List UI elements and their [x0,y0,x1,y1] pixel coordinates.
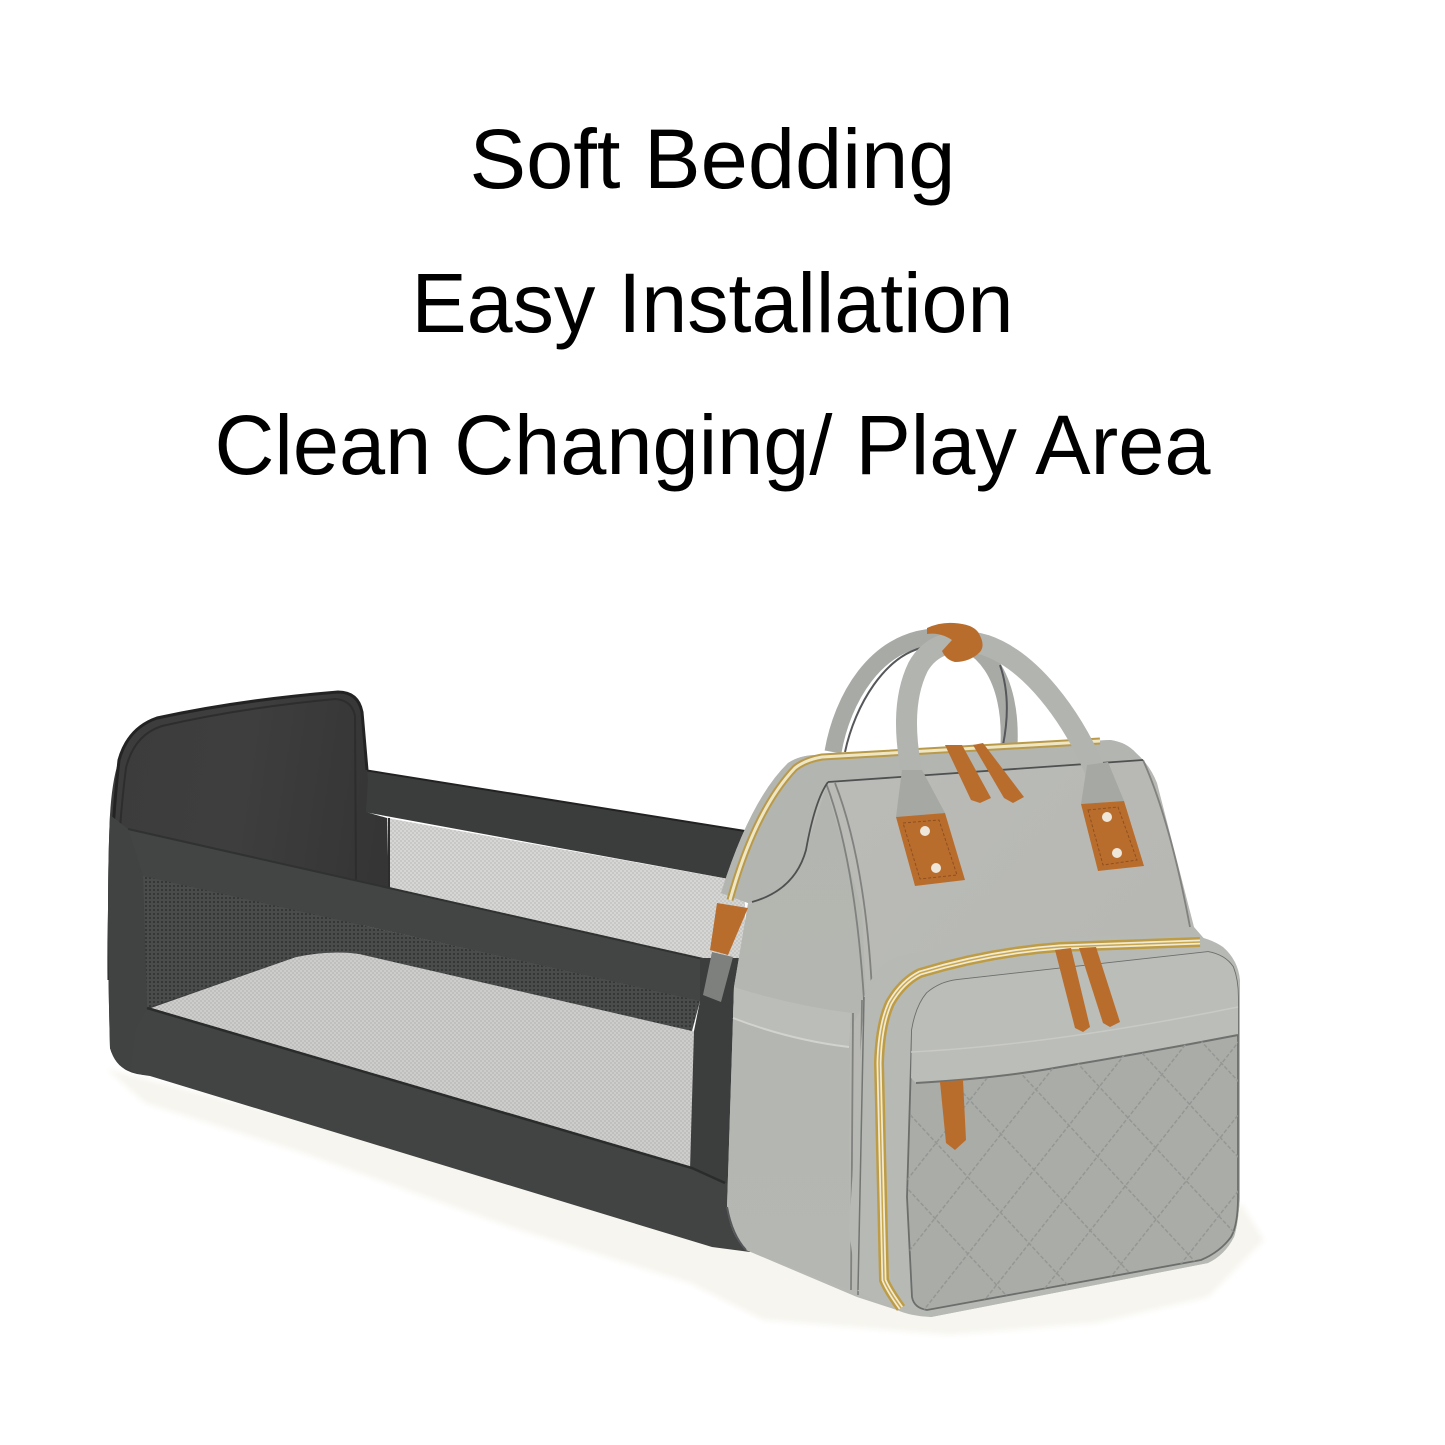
heading: Soft Bedding: Soft Bedding [470,112,956,206]
backpack side and front body [721,740,1240,1317]
title: feature list [214,112,1211,492]
backpack side panel [727,787,866,1290]
side strap: buckle [703,952,733,1002]
bassinet end mesh column [690,958,745,1190]
bassinet bottom band [110,1008,750,1252]
front pocket [849,935,1240,1317]
product: bag with travel bassinet [107,622,1262,1334]
leather tab: right [1081,801,1144,871]
panel: backpack [703,622,1240,1317]
quilted pattern [907,1042,1238,1310]
pocket front panel [907,952,1238,1310]
near carry handle [906,642,1097,780]
bassinet headboard [108,691,389,1075]
handle base: left [896,770,945,817]
bassinet far rail [364,770,745,882]
gold zipper: top [730,741,1100,900]
side strap: leather [710,903,748,955]
bassinet floor mesh [151,953,694,1168]
rear carry handle [833,637,1009,752]
gold zipper: front pocket [879,942,1200,1308]
bassinet far mesh wall [387,818,745,967]
pocket flap [911,952,1238,1083]
backpack side pocket [733,987,851,1047]
leather zipper pull: pocket slit [940,1080,966,1150]
bassinet left edge panel [108,815,147,1070]
heading: Easy Installation: Easy Installation [412,256,1014,350]
heading: Clean Changing/ Play Area: Clean Changing/ Play Area [214,398,1211,492]
handle base: right [1081,762,1124,804]
leather zipper pull: front pocket left [1055,948,1090,1032]
headboard piping [109,692,367,980]
body seams [826,760,1190,1295]
leather handle wrap [927,623,983,662]
leather zipper pull: top left [945,745,991,803]
leather tab: left [896,813,965,886]
panel: bassinet [108,691,750,1252]
leather zipper pull: front pocket right [1079,947,1120,1027]
bassinet front dark mesh [143,876,700,1031]
backpack top flap [721,740,1143,903]
leather zipper pull: top right [973,743,1024,803]
floor shadow [107,1069,1264,1335]
bassinet front rail [128,829,712,1002]
